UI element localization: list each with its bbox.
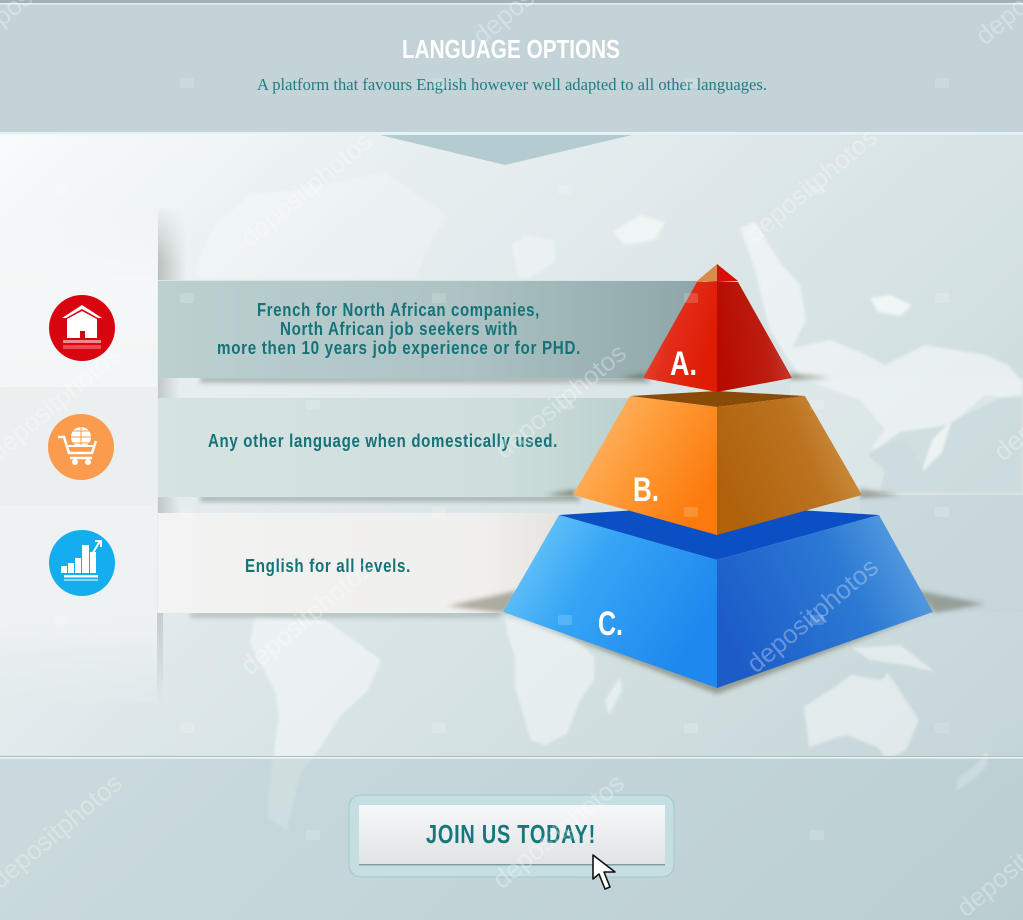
band A text: French for North African companies,	[257, 300, 540, 320]
tier B: orange	[573, 391, 862, 535]
button label: JOIN US TODAY!	[426, 819, 596, 849]
world map	[195, 172, 1022, 830]
band shadows	[190, 376, 650, 618]
watermarks: depositphotos	[741, 552, 884, 679]
pyramid base shadows	[448, 373, 985, 694]
panel: band C	[158, 513, 568, 613]
header pointer	[380, 135, 632, 165]
panel: left icon column	[0, 212, 157, 702]
band A text: North African job seekers with	[280, 319, 518, 339]
left column edge shadow	[157, 213, 182, 680]
icon: growth chart	[49, 530, 115, 596]
tier A: red	[643, 264, 792, 392]
watermarks: depositphotos	[487, 768, 630, 895]
label A: A.	[670, 345, 697, 383]
watermarks: depositphotos	[740, 122, 883, 249]
band A text	[217, 300, 581, 358]
pyramid	[503, 264, 933, 688]
subtitle: A platform that favours English however well adapted to all other languages.	[257, 75, 767, 94]
icon: shopping cart with globe	[48, 414, 114, 480]
icon: mouse cursor	[593, 855, 615, 889]
band A text: more then 10 years job experience or for PHD.	[217, 338, 581, 358]
icon: house	[49, 295, 115, 361]
watermarks: depositphotos	[235, 126, 378, 253]
watermarks: depositphotos	[489, 338, 632, 465]
header band	[0, 0, 1023, 165]
panel: band A	[158, 280, 703, 378]
page title: LANGUAGE OPTIONS	[402, 34, 620, 64]
band C text: English for all levels.	[245, 556, 411, 576]
band B text: Any other language when domestically used.	[208, 431, 558, 451]
label C: C.	[598, 605, 623, 643]
right band tints	[790, 378, 1023, 612]
lower divider band	[0, 756, 1023, 920]
call to action button	[349, 795, 674, 877]
camera watermark marks	[54, 78, 949, 840]
tier C: blue	[503, 505, 933, 688]
label B: B.	[633, 471, 659, 509]
watermarks: depositphotos	[235, 554, 378, 681]
panel: band B	[158, 398, 638, 497]
